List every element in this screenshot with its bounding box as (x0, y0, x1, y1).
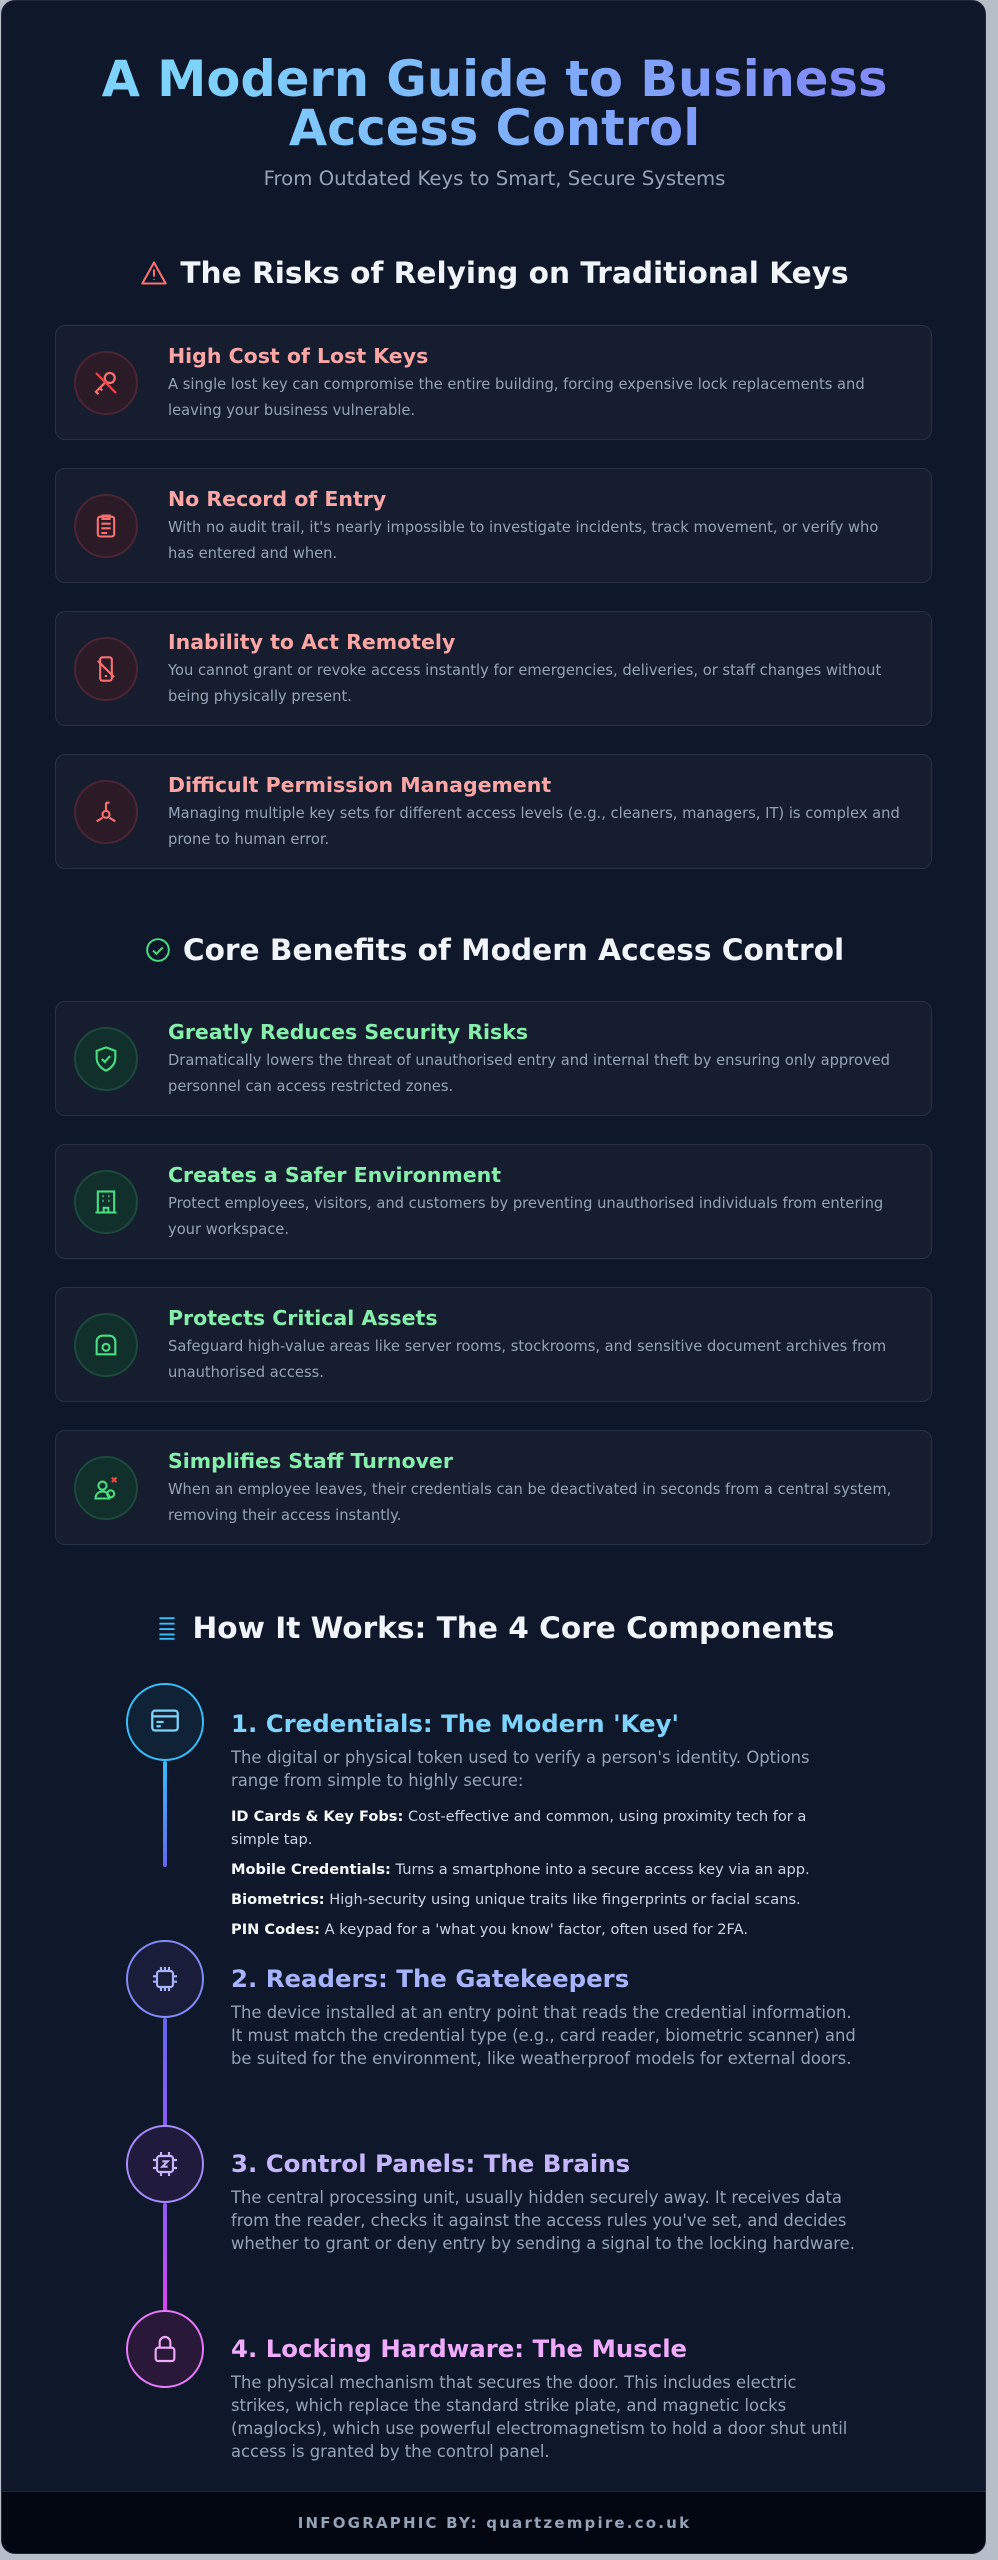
step 1 text: Mobile Credentials: Turns a smartphone into a secure access key via an app. (231, 1861, 810, 1878)
step 2 text: 2. Readers: The Gatekeepers (231, 1964, 629, 1993)
step 3 text: 3. Control Panels: The Brains (231, 2149, 630, 2178)
panel: benefit 1: Dramatically lowers the threat of unauthorised entry and internal theft by ensuring only approved personnel can access restricted zones. (168, 1052, 890, 1095)
icon: keys (74, 780, 138, 844)
panel: risk 2 (55, 468, 932, 583)
panel: risk 3: Inability to Act Remotely (168, 630, 455, 654)
step 4 text: 4. Locking Hardware: The Muscle (231, 2334, 687, 2363)
icon: building (74, 1170, 138, 1234)
panel: benefit 1 (55, 1001, 932, 1116)
icon: shield (74, 1027, 138, 1091)
step 1 text: range from simple to highly secure: (231, 1771, 523, 1790)
icon: user remove (74, 1456, 138, 1520)
panel: benefit 1: Greatly Reduces Security Risks (168, 1020, 528, 1044)
step 4 text: access is granted by the control panel. (231, 2442, 550, 2461)
step 4 text: strikes, which replace the standard strike plate, and magnetic locks (231, 2396, 786, 2415)
step 2 text (230, 1964, 856, 2068)
step 3 text: from the reader, checks it against the access rules you've set, and decides (231, 2211, 846, 2230)
step 2 icon: chip (126, 1940, 204, 2018)
panel: risk 4: Difficult Permission Management (168, 773, 551, 797)
icon: phone off (74, 637, 138, 701)
footer: INFOGRAPHIC BY: quartzempire.co.uk (298, 2514, 691, 2532)
panel: risk 1: High Cost of Lost Keys (168, 344, 428, 368)
subtitle: From Outdated Keys to Smart, Secure Systems (264, 167, 725, 190)
step 1 text: The digital or physical token used to verify a person's identity. Options (231, 1748, 810, 1767)
icon: records (74, 494, 138, 558)
step 3 text (230, 2149, 855, 2253)
panel: benefit 4: Simplifies Staff Turnover (168, 1449, 453, 1473)
title (2, 55, 987, 153)
step 2 text: The device installed at an entry point that reads the credential information. (231, 2003, 852, 2022)
panel: risk 3: You cannot grant or revoke access instantly for emergencies, deliveries, or staff changes without being physically present. (168, 662, 881, 705)
title: Access Control (289, 99, 700, 157)
panel: risk 3 (55, 611, 932, 726)
step 3 icon: control panel (126, 2125, 204, 2203)
heading: how it works: How It Works: The 4 Core Components (192, 1611, 835, 1645)
panel: risk 1 (55, 325, 932, 440)
title: A Modern Guide to Business (102, 50, 887, 108)
panel: benefit 2: Protect employees, visitors, and customers by preventing unauthorised individuals from entering your workspace. (168, 1195, 883, 1238)
timeline connector lines (163, 1761, 167, 2310)
panel: benefit 3: Safeguard high-value areas like server rooms, stockrooms, and sensitive document archives from unauthorised access. (168, 1338, 886, 1381)
panel: benefit 3 (55, 1287, 932, 1402)
step 1 text: 1. Credentials: The Modern 'Key' (231, 1709, 679, 1738)
step 1 text: ID Cards & Key Fobs: Cost-effective and common, using proximity tech for a (231, 1808, 806, 1825)
step 4 text (230, 2334, 847, 2461)
panel: benefit 2: Creates a Safer Environment (168, 1163, 501, 1187)
step 1 text (230, 1709, 810, 1938)
step 3 text: The central processing unit, usually hidden securely away. It receives data (231, 2188, 842, 2207)
heading: risks: The Risks of Relying on Traditional Keys (180, 256, 849, 290)
step 4 icon: lock (126, 2310, 204, 2388)
panel: benefit 2 (55, 1144, 932, 1259)
step 1 text: Biometrics: High-security using unique traits like fingerprints or facial scans. (231, 1891, 801, 1908)
step 1 text: simple tap. (231, 1831, 312, 1848)
step 2 text: It must match the credential type (e.g., card reader, biometric scanner) and (231, 2026, 856, 2045)
step 4 text: (maglocks), which use powerful electromagnetism to hold a door shut until (231, 2419, 847, 2438)
panel: benefit 3: Protects Critical Assets (168, 1306, 438, 1330)
footer (2, 2491, 987, 2555)
step 1 icon: credential card (126, 1683, 204, 1761)
panel: risk 2: With no audit trail, it's nearly impossible to investigate incidents, track movement, or verify who has entered and when. (168, 519, 878, 562)
panel: risk 1: A single lost key can compromise the entire building, forcing expensive lock replacements and leaving your business vulnerable. (168, 376, 865, 419)
step 4 text: The physical mechanism that secures the door. This includes electric (231, 2373, 797, 2392)
panel: risk 4: Managing multiple key sets for different access levels (e.g., cleaners, managers, IT) is complex and prone to human error. (168, 805, 900, 848)
panel: risk 2: No Record of Entry (168, 487, 386, 511)
heading: benefits: Core Benefits of Modern Access Control (183, 933, 844, 967)
panel: risk 4 (55, 754, 932, 869)
step 2 text: be suited for the environment, like weatherproof models for external doors. (231, 2049, 851, 2068)
icon: crossed key (74, 351, 138, 415)
panel: benefit 4 (55, 1430, 932, 1545)
step 1 text: PIN Codes: A keypad for a 'what you know' factor, often used for 2FA. (231, 1921, 748, 1938)
step 3 text: whether to grant or deny entry by sending a signal to the locking hardware. (231, 2234, 855, 2253)
icon: vault (74, 1313, 138, 1377)
panel: benefit 4: When an employee leaves, their credentials can be deactivated in seconds from a central system, removing their access instantly. (168, 1481, 891, 1524)
